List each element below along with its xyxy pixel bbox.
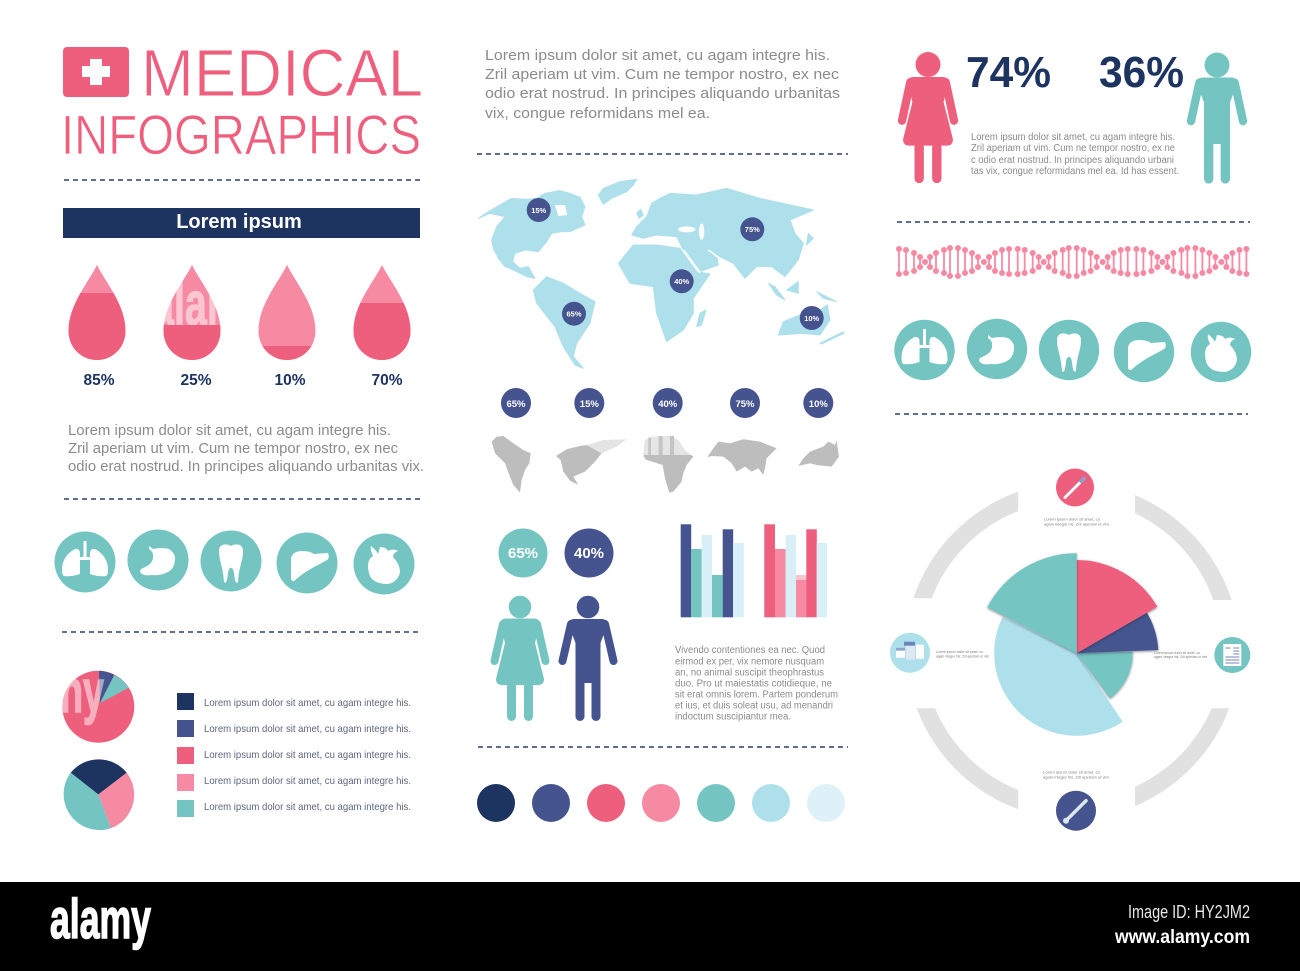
caption: top: agam integre his. Zril aperiam ut vim.: [1044, 522, 1110, 526]
drop 85%: [68, 265, 126, 360]
caption: right: Lorem ipsum dolor sit amet, cu: [1154, 650, 1200, 655]
caption: left: agam integre his. Zril aperiam ut vim.: [936, 654, 990, 658]
legend: Lorem ipsum dolor sit amet, cu agam integre his.: [204, 775, 411, 787]
ring segments: [913, 492, 1232, 809]
chart: exploded pie: [987, 553, 1158, 736]
text block: left paragraph: [68, 423, 424, 475]
icon: tooth: [1039, 320, 1099, 380]
icon: syringe: [1056, 468, 1094, 506]
figure: woman: [494, 596, 546, 721]
caption: left: Lorem ipsum dolor sit amet, cu: [936, 649, 983, 654]
percent circles: 40%: [574, 545, 604, 562]
figure: man: [562, 596, 614, 721]
text block: centre top paragraph: Lorem ipsum dolor sit amet, cu agam integre his.: [485, 47, 830, 64]
row of percent badges: [501, 388, 833, 418]
drop 10%: [258, 265, 316, 360]
row of percent badges: 75%: [735, 399, 755, 410]
caption: right: agam integre his. Zril aperiam ut vim.: [1154, 654, 1208, 659]
drop percentages: 10%: [274, 372, 306, 389]
legend: Lorem ipsum dolor sit amet, cu agam integre his.: [204, 749, 411, 761]
figure: woman pink: [902, 52, 954, 183]
text block: centre top paragraph: [485, 47, 840, 122]
footer url: www.alamy.com: [1114, 927, 1250, 948]
title: Medical: MEDICAL: [141, 36, 423, 111]
text block: bars caption: et ius, et duis soleat usu, ad menandri: [675, 700, 833, 712]
text block: bars caption: Vivendo contentiones ea nec. Quod: [675, 645, 825, 656]
icon: tooth: [200, 530, 262, 592]
stat: 74%: 74%: [966, 48, 1051, 97]
footer bar: [0, 882, 1300, 971]
stat: 36%: 36%: [1099, 48, 1184, 97]
drop percentages: [83, 372, 403, 389]
drop 25%: [164, 265, 220, 360]
DNA strand: [899, 248, 1246, 276]
bar chart: blue group: [681, 524, 744, 617]
icon: clipboard: [1214, 637, 1250, 673]
icon: medical cross: [63, 47, 129, 97]
colour swatches: [477, 784, 845, 822]
map badges: 65%: [566, 310, 582, 318]
text block: bars caption: sit erat omnis lorem. Partem ponderum: [675, 690, 838, 700]
text block: bars caption: an, no animal suscipit theophrastus: [675, 668, 824, 678]
text block: right paragraph: Zril aperiam ut vim. Cum ne tempor nostro, ex ne: [971, 143, 1175, 154]
icon: medicine: [890, 633, 930, 673]
percent circles: 65%: [508, 545, 538, 562]
world map: [478, 179, 844, 368]
text block: left paragraph: odio erat nostrud. In principes aliquando urbanitas vix.: [68, 459, 424, 475]
figure: man teal: [1191, 53, 1243, 184]
caption: left: [936, 649, 990, 658]
text block: right paragraph: Lorem ipsum dolor sit amet, cu agam integre his.: [971, 132, 1175, 143]
row of percent badges: 10%: [809, 399, 828, 410]
chart: bottom pie: [64, 759, 134, 830]
drop 70%: [354, 265, 410, 360]
text block: centre top paragraph: vix, congue reformidans mel ea.: [485, 105, 710, 122]
grey continents: [492, 435, 839, 493]
text block: left paragraph: Zril aperiam ut vim. Cum ne tempor nostro, ex nec: [68, 441, 398, 457]
icons: organs row right: [894, 319, 1251, 382]
legend: [177, 693, 411, 817]
map badges: 40%: [674, 277, 690, 286]
panel: blood drops: [68, 265, 410, 389]
text block: right paragraph: c odio erat nostrud. In principes aliquando urbani: [971, 155, 1174, 166]
row of percent badges: 65%: [506, 399, 526, 410]
title: Infographics: INFOGRAPHICS: [61, 103, 421, 166]
text block: centre top paragraph: Zril aperiam ut vim. Cum ne tempor nostro, ex nec: [485, 66, 840, 83]
icon: heart: [1191, 322, 1251, 382]
map badges: 75%: [745, 225, 760, 234]
text block: bars caption: indoctum suscipiantur mea.: [675, 712, 791, 722]
caption: top: Lorem ipsum dolor sit amet, cu: [1044, 516, 1100, 522]
heading bar: Lorem ipsum: [176, 211, 302, 233]
footer image id: Image ID: HY2JM2: [1128, 902, 1250, 922]
icon: heart: [354, 534, 414, 594]
text block: bars caption: [675, 645, 838, 722]
icon: stomach: [967, 319, 1027, 379]
legend: Lorem ipsum dolor sit amet, cu agam integre his.: [204, 801, 411, 813]
map badges: 10%: [804, 314, 820, 323]
text block: bars caption: eirmod ex per, vix nemore nusquam: [675, 656, 824, 668]
drop percentages: 85%: [83, 372, 115, 389]
caption: top: [1044, 516, 1110, 526]
bar chart: pink group: [764, 524, 827, 617]
icon: liver: [276, 532, 338, 594]
drop percentages: 70%: [371, 372, 403, 389]
text block: right paragraph: [971, 132, 1179, 177]
percent circles: [498, 528, 614, 578]
text block: bars caption: duo. Pro ut maiestatis cotidieque, ne: [675, 678, 832, 690]
row of percent badges: 15%: [580, 399, 599, 410]
text block: left paragraph: Lorem ipsum dolor sit amet, cu agam integre his.: [68, 423, 391, 439]
icon: lungs: [54, 532, 116, 592]
caption: bottom: Lorem ipsum dolor sit amet, cu: [1043, 770, 1100, 774]
caption: right: [1154, 650, 1208, 659]
icon: thermometer: [1056, 791, 1096, 831]
drop 25%: alam: [152, 270, 242, 339]
footer logo: alamy: [50, 887, 151, 950]
icons: organs row left: [54, 530, 414, 594]
caption: bottom: [1043, 770, 1110, 780]
title block: [61, 36, 423, 166]
map badges: 15%: [531, 206, 547, 215]
legend: Lorem ipsum dolor sit amet, cu agam integre his.: [204, 723, 411, 735]
caption: bottom: agam integre his. Zril aperiam ut vim.: [1043, 774, 1110, 780]
text block: centre top paragraph: odio erat nostrud. In principes aliquando urbanitas: [485, 85, 840, 102]
row of percent badges: 40%: [658, 399, 678, 410]
drop percentages: 25%: [180, 372, 212, 389]
heading bar: [63, 208, 420, 238]
icon: stomach: [128, 530, 188, 590]
chart: top pie: [62, 670, 134, 743]
text block: right paragraph: tas vix, congue reformidans mel ea. Id has essent.: [971, 166, 1179, 177]
icon: lungs: [894, 320, 955, 380]
map badges: [527, 198, 824, 330]
icon: liver: [1114, 322, 1174, 382]
chart: top pie: ny: [60, 658, 104, 725]
legend: Lorem ipsum dolor sit amet, cu agam integre his.: [204, 697, 411, 709]
